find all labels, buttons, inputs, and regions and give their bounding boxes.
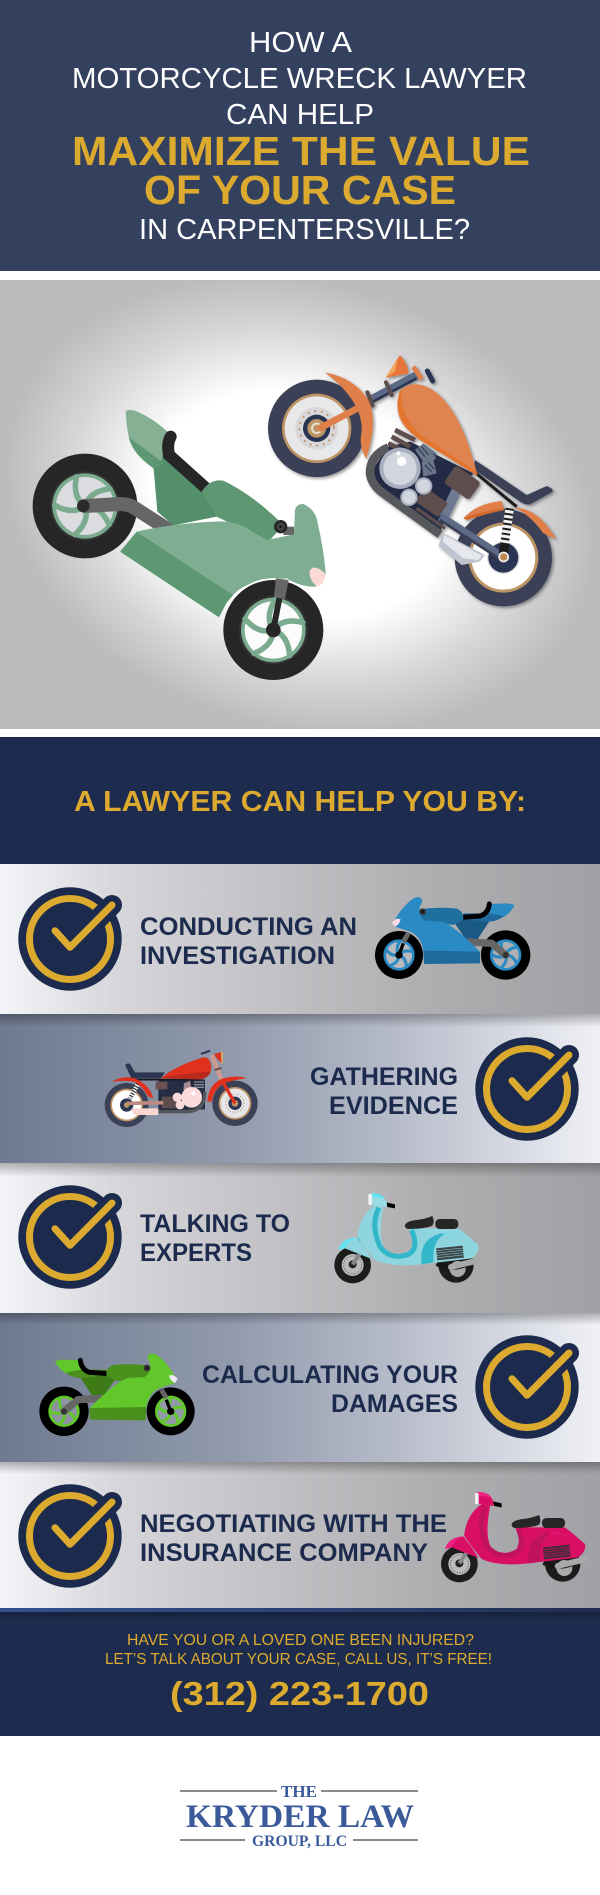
logo: the kryder law group: GROUP, LLC	[252, 1833, 347, 1850]
text: gathering evidence: GATHERING	[310, 1064, 458, 1091]
icon: red cruiser motorcycle	[105, 1051, 258, 1127]
title highlight: maximize the value of your case: OF YOUR CASE	[144, 167, 456, 213]
text: calculating your damages	[202, 1362, 458, 1418]
text: gathering evidence	[310, 1064, 458, 1120]
icon: check badge	[475, 1037, 579, 1141]
title: how a motorcycle wreck lawyer can help: CAN HELP	[226, 99, 374, 131]
panel: lawyer can help heading	[0, 737, 600, 864]
text: talking to experts: TALKING TO	[140, 1211, 290, 1238]
panel: header	[0, 0, 600, 271]
text: talking to experts: EXPERTS	[140, 1240, 252, 1267]
panel: call to action footer	[0, 1608, 600, 1736]
title highlight: maximize the value of your case	[72, 128, 530, 213]
title: how a motorcycle wreck lawyer can help: MOTORCYCLE WRECK LAWYER	[72, 63, 527, 95]
panel: conducting an investigation	[0, 864, 600, 1014]
icon: check badge	[18, 1185, 122, 1289]
text: calculating your damages: DAMAGES	[331, 1391, 458, 1418]
text: gathering evidence: EVIDENCE	[329, 1093, 458, 1120]
logo: the kryder law group	[180, 1782, 418, 1850]
icon: blue sport motorcycle	[375, 897, 530, 980]
icon: check badge	[18, 1484, 122, 1588]
panel: calculating your damages	[0, 1313, 600, 1462]
icon: check badge	[18, 887, 122, 991]
icon: green sport motorcycle	[33, 410, 326, 680]
title: how a motorcycle wreck lawyer can help: HOW A	[249, 27, 353, 59]
text: call to action	[105, 1632, 492, 1668]
text: call to action: LET’S TALK ABOUT YOUR CASE, CALL US, IT’S FREE!	[105, 1651, 492, 1668]
heading: a lawyer can help you by: A LAWYER CAN HELP YOU BY:	[74, 786, 526, 818]
text: negotiating with the insurance company: NEGOTIATING WITH THE	[140, 1511, 447, 1538]
panel: talking to experts	[0, 1163, 600, 1313]
text: talking to experts	[140, 1211, 290, 1267]
title: how a motorcycle wreck lawyer can help	[72, 27, 527, 131]
icon: lime green sport motorcycle	[39, 1354, 195, 1436]
text: call to action: HAVE YOU OR A LOVED ONE BEEN INJURED?	[127, 1632, 474, 1649]
icon: check badge	[475, 1335, 579, 1439]
icon: pink scooter	[441, 1492, 585, 1582]
logo: the kryder law group: KRYDER LAW	[186, 1799, 414, 1835]
text: calculating your damages: CALCULATING YOUR	[202, 1362, 458, 1389]
text: conducting an investigation: INVESTIGATION	[140, 943, 335, 970]
logo: the kryder law group: THE	[281, 1782, 317, 1801]
text: negotiating with the insurance company	[140, 1511, 447, 1567]
title location line: IN CARPENTERSVILLE?	[139, 214, 470, 246]
panel: negotiating with the insurance company	[0, 1462, 600, 1608]
title highlight: maximize the value of your case: MAXIMIZE THE VALUE	[72, 128, 530, 174]
text: phone number: (312) 223-1700	[170, 1676, 429, 1713]
text: negotiating with the insurance company: INSURANCE COMPANY	[140, 1540, 429, 1567]
panel: hero illustration	[0, 280, 600, 729]
text: conducting an investigation: CONDUCTING AN	[140, 914, 357, 941]
panel: gathering evidence	[0, 1014, 600, 1163]
text: conducting an investigation	[140, 914, 357, 970]
icon: orange cruiser motorcycle	[268, 355, 556, 606]
icon: teal scooter	[334, 1193, 479, 1283]
